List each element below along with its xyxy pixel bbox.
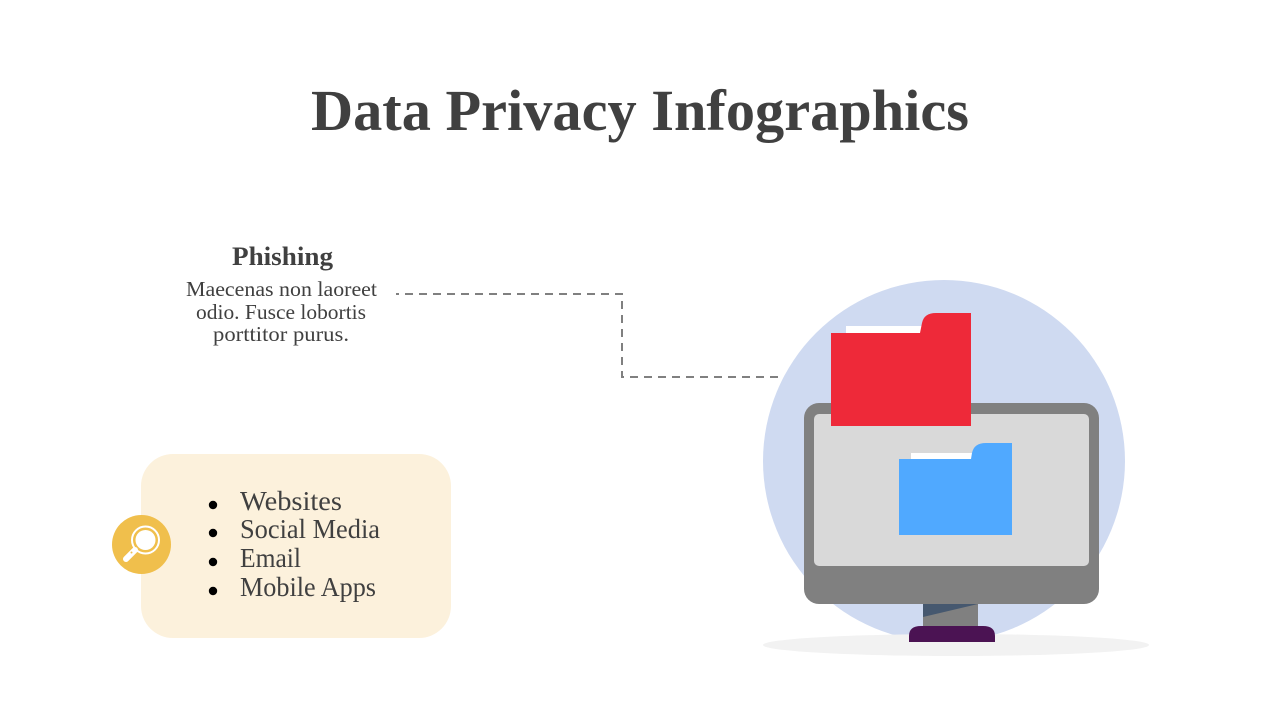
description: odio. Fusce lobortis <box>196 300 366 324</box>
description: porttitor purus. <box>213 322 349 346</box>
monitor body <box>804 403 1099 604</box>
bullet list: Social Media <box>240 514 380 544</box>
title: Data Privacy Infographics <box>311 78 969 143</box>
bullet list: Websites <box>240 486 342 516</box>
ground shadow <box>763 634 1149 656</box>
monitor base <box>909 626 995 642</box>
text block: phishing <box>186 242 377 346</box>
icon: magnifying glass <box>112 515 171 574</box>
icon: red folder <box>831 313 971 426</box>
background circle <box>763 280 1125 642</box>
illustration: computer with folders <box>763 280 1149 656</box>
bullet list <box>209 486 380 602</box>
heading: phishing: Phishing <box>232 242 333 271</box>
description <box>186 277 377 346</box>
panel: list card <box>141 454 451 638</box>
arrow: dashed connector <box>396 294 779 377</box>
card background <box>141 454 451 638</box>
description: Maecenas non laoreet <box>186 277 377 301</box>
monitor stand <box>923 600 978 630</box>
monitor screen <box>814 414 1089 566</box>
icon: blue folder <box>899 443 1012 535</box>
bullet list: Mobile Apps <box>240 572 376 602</box>
bullet list: Email <box>240 543 301 573</box>
